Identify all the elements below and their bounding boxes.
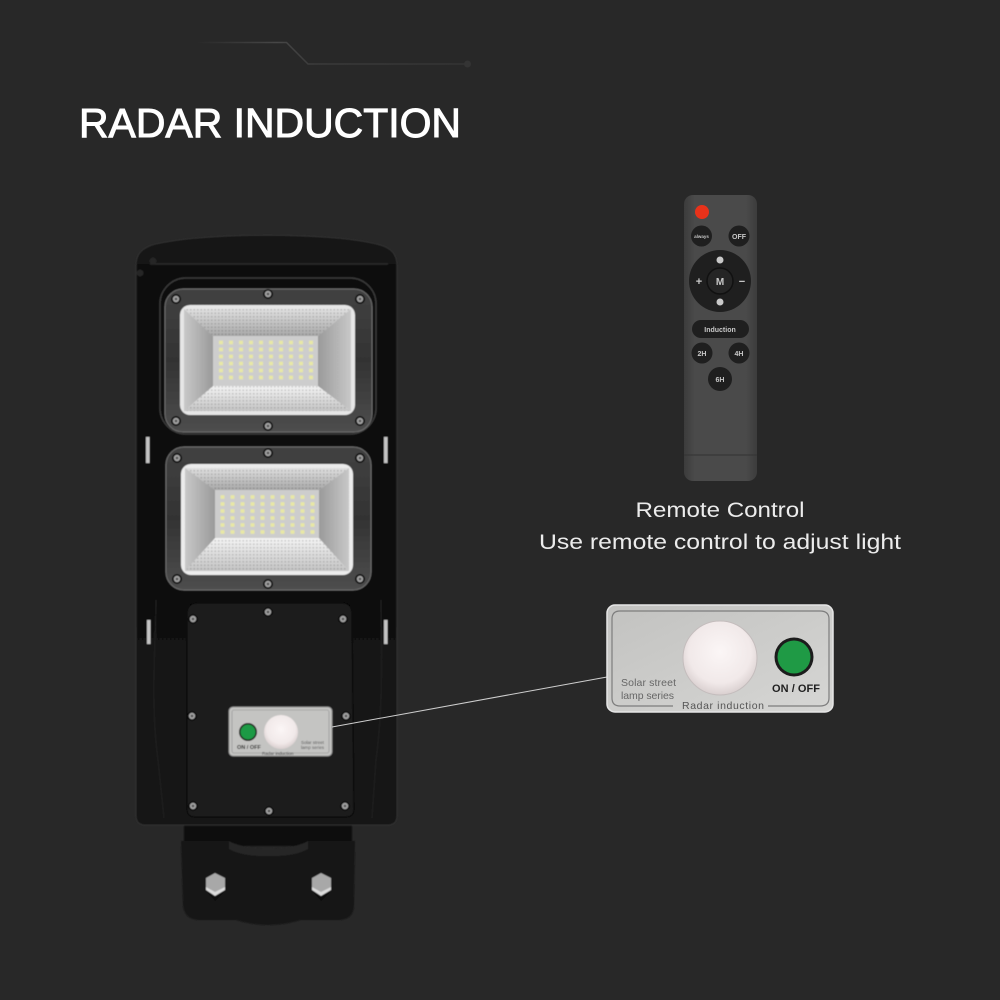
remote control caption: Use remote control to adjust light	[539, 531, 901, 554]
direction pad: +	[696, 276, 702, 288]
lamp body	[136, 235, 397, 825]
small sensor plate: lamp series	[301, 745, 325, 750]
bolt left	[205, 873, 226, 901]
power button	[695, 205, 709, 219]
enlarged sensor plate: lamp series	[621, 690, 674, 702]
on/off button	[774, 638, 814, 676]
timer buttons: 4H	[735, 351, 743, 358]
induction button	[692, 320, 749, 338]
direction pad: M	[716, 277, 724, 288]
timer buttons	[692, 342, 750, 391]
induction button: Induction	[704, 327, 736, 334]
mode buttons: OFF	[732, 234, 747, 241]
title: RADAR INDUCTION	[79, 100, 461, 146]
side slots	[146, 437, 388, 644]
street lamp	[136, 235, 397, 925]
small sensor plate: Solar street	[301, 740, 325, 745]
enlarged sensor plate: Radar induction	[682, 700, 764, 712]
decorative circuit line	[196, 42, 471, 68]
remote control caption	[539, 499, 901, 554]
small sensor plate	[229, 707, 332, 756]
PIR sensor dome	[683, 621, 757, 695]
bolt right	[311, 873, 332, 901]
remote control caption: Remote Control	[636, 499, 804, 522]
enlarged sensor plate: ON / OFF	[772, 683, 820, 695]
timer buttons: 6H	[716, 377, 724, 384]
direction pad: −	[739, 276, 745, 288]
mode buttons: always	[694, 234, 709, 239]
direction pad	[689, 250, 751, 312]
callout leader line	[332, 677, 607, 727]
upper LED module	[160, 278, 376, 434]
mounting bracket	[181, 822, 355, 925]
enlarged sensor plate: Solar street	[621, 677, 676, 689]
battery cover panel	[187, 603, 354, 817]
remote control	[684, 195, 757, 481]
enlarged sensor plate	[607, 605, 833, 712]
lower LED module	[166, 447, 371, 590]
small sensor plate: Radar induction	[262, 751, 294, 756]
mode buttons	[691, 226, 750, 246]
small sensor plate: ON / OFF	[237, 745, 261, 751]
timer buttons: 2H	[698, 351, 706, 358]
